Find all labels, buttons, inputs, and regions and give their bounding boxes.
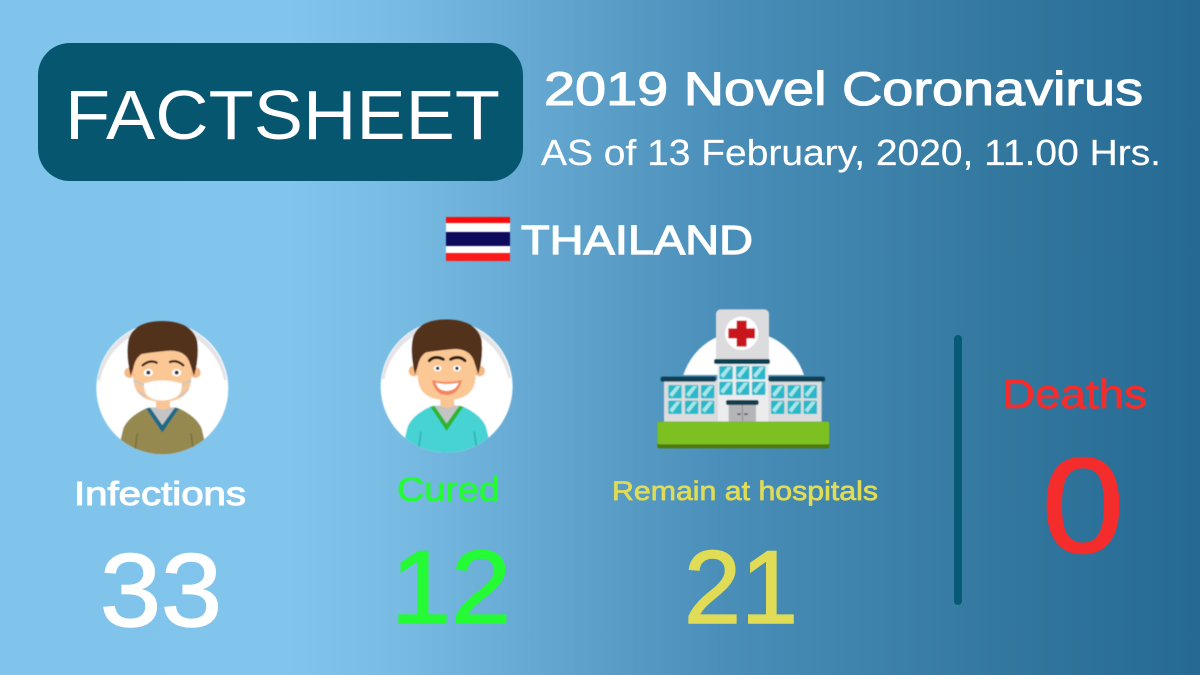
panel: cured <box>381 319 513 646</box>
panel: infections <box>74 321 246 649</box>
hospital count: 21 <box>684 530 798 646</box>
deaths count: 0 <box>1042 430 1124 581</box>
panel: remain at hospitals <box>612 309 878 646</box>
factsheet badge <box>38 43 523 181</box>
icon: Thailand flag <box>446 217 510 261</box>
country name: THAILAND <box>521 217 753 263</box>
date subtitle: AS of 13 February, 2020, 11.00 Hrs. <box>541 132 1161 173</box>
icon: smiling recovered patient <box>381 319 513 455</box>
cured label: Cured <box>397 471 500 509</box>
badge heading: FACTSHEET <box>65 76 500 154</box>
vertical divider <box>954 335 962 605</box>
infections label: Infections <box>74 475 246 512</box>
deaths label: Deaths <box>1002 371 1147 417</box>
cured count: 12 <box>391 530 511 646</box>
infections count: 33 <box>100 533 222 649</box>
country label <box>446 217 753 263</box>
title: 2019 Novel Coronavirus <box>544 62 1143 115</box>
icon: hospital <box>657 309 829 458</box>
panel: deaths <box>1002 371 1147 581</box>
hospital label: Remain at hospitals <box>612 476 878 506</box>
icon: masked patient <box>96 321 228 457</box>
